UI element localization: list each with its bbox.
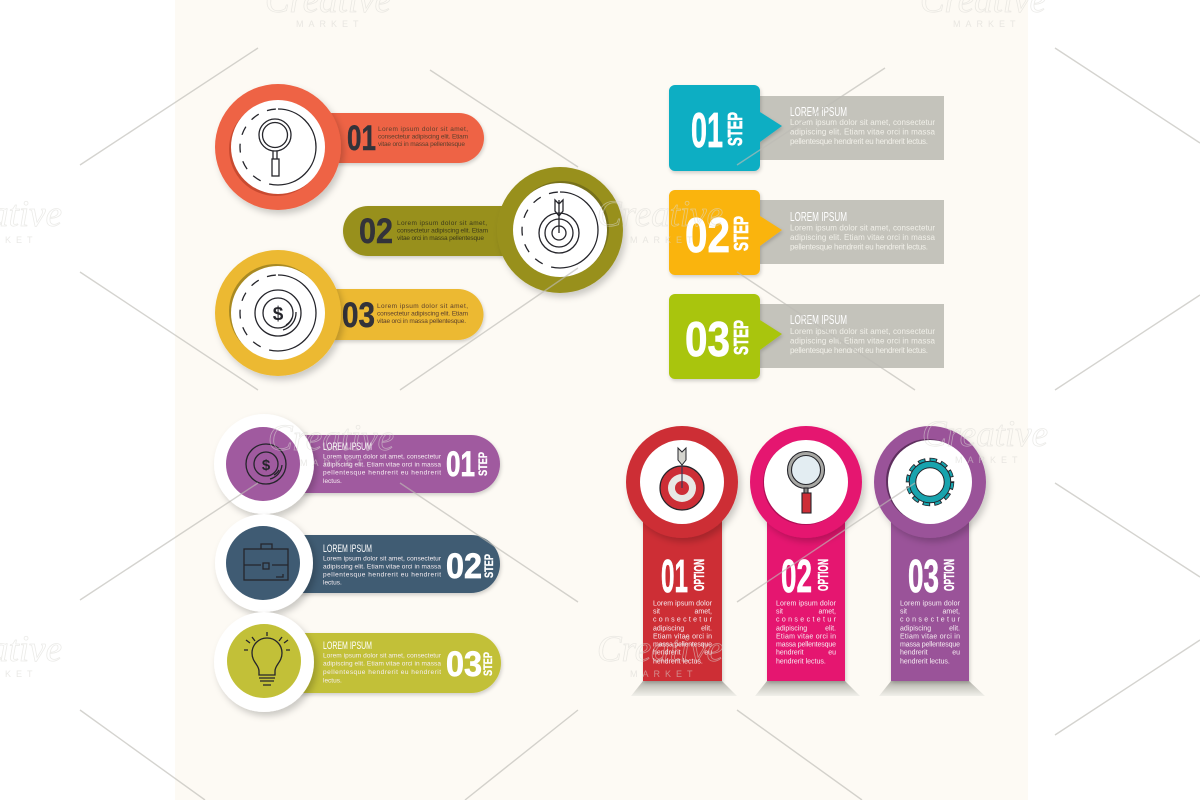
step 02 [669,190,944,275]
step 01: adipiscing elit. Etiam vitae orci in massa [790,128,936,136]
option 02 [750,426,862,696]
option 01: Lorem ipsum dolor [653,600,713,608]
watermark logos: MARKET [296,19,364,29]
option 03: adipiscing [900,626,931,632]
background panel [175,0,1028,800]
tab 01: Lorem ipsum dolor sit amet, [378,126,468,133]
pill 03: pellentesque hendrerit eu hendrerit [323,669,441,676]
option 01: hendrerit [653,650,681,656]
option 02: amet, [818,608,836,616]
pill 01: STEP [476,452,490,476]
tab 02: vitae orci in massa pellentesque [397,235,484,242]
icon: target [660,448,704,510]
pill 02: STEP [482,554,496,578]
step 03: pellentesque hendrerit eu hendrerit lectus. [790,346,928,355]
option 01: Etiam vitae orci in [653,634,712,640]
option 03: 03 [908,550,939,602]
option 03: massa pellentesque [900,642,960,648]
pill 03: LOREM IPSUM [323,640,372,652]
watermark logos: Creative [597,194,723,235]
watermark logos: MARKET [300,458,368,468]
step 02: LOREM IPSUM [790,209,847,224]
icon: light bulb [244,632,290,685]
option 01: 01 [661,550,688,602]
option 01: adipiscing [653,626,684,632]
tab 01: consectetur adipiscing elit. Etiam [378,134,468,140]
step 03: 03 [685,313,730,367]
step 01: STEP [725,112,747,146]
option 03: Lorem ipsum dolor [900,600,961,608]
icon: target [522,192,598,268]
option 02: hendrerit [776,650,804,656]
pill 02: 02 [446,547,482,586]
option 03: hendrerit [900,650,928,656]
step 03: STEP [731,320,753,355]
step 01: Lorem ipsum dolor sit amet, consectetur [790,118,935,127]
watermark logos: Creative [268,418,394,459]
pill 02: lectus. [323,580,342,586]
panel: step list [669,85,944,379]
tab 02: 02 [359,212,393,251]
step 03: adipiscing elit. Etiam vitae orci in massa [790,336,936,346]
step 01: LOREM IPSUM [790,104,847,119]
tab 03 [215,250,484,376]
option 03: sit [900,608,907,616]
watermark logos: MARKET [630,669,698,679]
pill 01: adipiscing elit. Etiam vitae orci in massa [323,462,441,468]
tab 03: vitae orci in massa pellentesque. [377,318,466,325]
option 02: Lorem ipsum dolor [776,600,837,608]
step 02: Lorem ipsum dolor sit amet, consectetur [790,224,935,232]
watermark logos: Creative [597,629,723,670]
step 02: adipiscing elit. Etiam vitae orci in massa [790,233,936,242]
option 01: hendrerit lectus. [653,658,703,666]
option 02: eu [828,650,836,656]
step 02: STEP [731,216,753,251]
option 02: massa pellentesque [776,642,836,648]
step 02: pellentesque hendrerit eu hendrerit lectus. [790,242,928,252]
step 03: Lorem ipsum dolor sit amet, consectetur [790,327,935,336]
pill 03: adipiscing elit. Etiam vitae orci in massa [323,660,441,668]
step 03: LOREM IPSUM [790,312,847,327]
option 01: massa pellentesque [653,642,712,648]
pill 02: LOREM IPSUM [323,543,372,555]
option 02: adipiscing [776,626,807,632]
pill 03: lectus. [323,678,342,684]
option 03: OPTION [941,559,958,591]
tab 02: Lorem ipsum dolor sit amet, [397,220,487,227]
icon: briefcase [244,544,288,580]
tab 03: consectetur adipiscing elit. Etiam [377,310,468,318]
option 03: consectetur [900,616,961,624]
tab 01: vitae orci in massa pellentesque [378,141,465,148]
option 02: Etiam vitae orci in [776,634,836,640]
option 02: sit [776,608,783,616]
step 03 [669,294,944,379]
tab 01: 01 [347,119,376,158]
step 01: pellentesque hendrerit eu hendrerit lectus. [790,137,928,146]
pill 03: Lorem ipsum dolor sit amet, consectetur [323,652,442,660]
pill 02 [215,514,500,612]
tab 02 [343,167,623,293]
option 01: eu [704,650,712,656]
panel: pill list [214,414,501,712]
pill 01: pellentesque hendrerit eu hendrerit [323,470,441,476]
option 03: eu [952,650,960,656]
option 03 [874,426,986,696]
watermark logos [0,0,1048,679]
option 03: Etiam vitae orci in [900,634,960,640]
option 01: OPTION [691,559,708,591]
pill 01 [214,414,500,514]
step 01: 01 [691,104,723,158]
tab 01 [215,84,484,210]
icon: gear [909,461,951,503]
pill 01: LOREM IPSUM [323,441,372,453]
panel: circle and tab list [215,84,623,376]
icon: magnifier [788,452,824,513]
watermark logos: MARKET [955,455,1023,465]
tab 03: Lorem ipsum dolor sit amet, [377,303,468,310]
icon: dollar coin [240,275,316,351]
option 02: 02 [781,550,812,602]
watermark logos: Creative [922,414,1048,455]
icon: magnifier [240,109,316,185]
pill 01: $ [262,457,271,474]
pill 02: adipiscing elit. Etiam vitae orci in massa [323,564,441,570]
option 01: amet, [694,608,712,616]
pill 02: Lorem ipsum dolor sit amet, consectetur [323,556,442,562]
tab 02: consectetur adipiscing elit. Etiam [397,228,488,234]
option 01: consectetur [653,616,713,624]
option 02: consectetur [776,616,837,624]
step 01 [669,85,944,171]
option 02: hendrerit lectus. [776,658,826,666]
tab 03: 03 [342,296,375,335]
pill 03 [214,612,501,712]
pill 03: STEP [481,652,495,676]
icon: dollar coin [246,444,286,484]
option 01: elit. [701,626,712,632]
pill 02: pellentesque hendrerit eu hendrerit [323,572,441,578]
step 02: 02 [685,209,730,263]
pill 01: 01 [446,445,475,484]
tab 03: $ [273,304,284,325]
option 02: OPTION [815,559,832,591]
option 01 [626,426,738,696]
option 01: sit [653,608,660,616]
option 03: elit. [949,626,960,632]
option 02: elit. [825,626,836,632]
pill 01: Lorem ipsum dolor sit amet, consectetur [323,454,442,460]
pill 01: lectus. [323,478,342,485]
watermark logos: MARKET [953,19,1021,29]
panel: option columns [626,426,986,696]
option 03: amet, [942,608,960,616]
pill 03: 03 [446,645,482,684]
watermark logos: MARKET [630,235,698,245]
option 03: hendrerit lectus. [900,658,950,666]
